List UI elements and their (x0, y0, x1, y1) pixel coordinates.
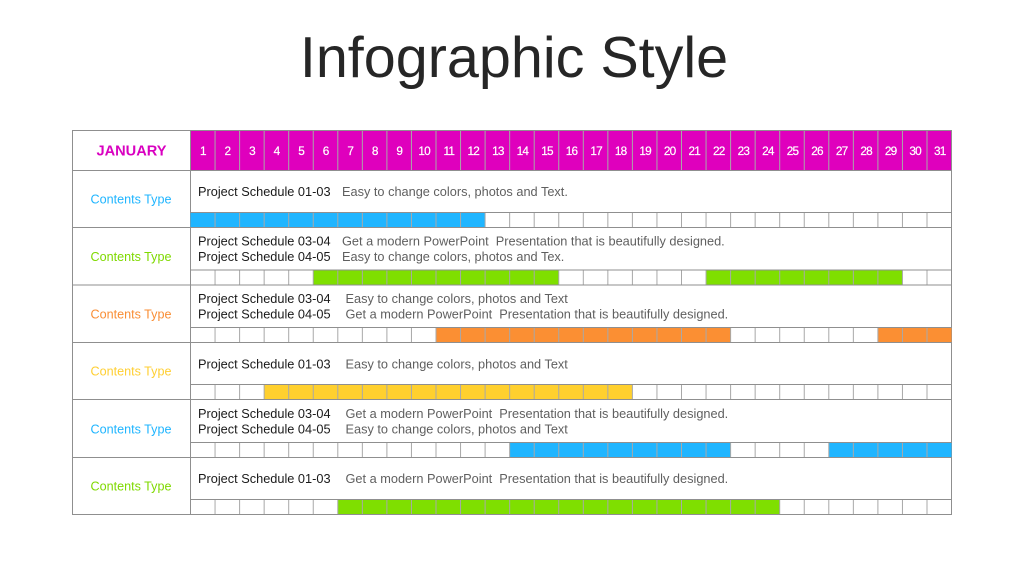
row 4 description: Project Schedule 01-03 (198, 356, 331, 372)
row 4 description (198, 356, 568, 372)
row 2 description: Project Schedule 03-04 (198, 234, 331, 248)
row 1 description: Easy to change colors, photos and Text. (342, 184, 568, 199)
row 3 label: Contents Type (91, 308, 171, 322)
row 3 timeline bar (190, 327, 952, 343)
day header: 23 (738, 144, 750, 158)
title: Infographic Style (300, 26, 728, 90)
day header: 3 (249, 144, 256, 158)
row 1 timeline bar (190, 212, 952, 228)
day header: 10 (418, 144, 431, 158)
day header: 13 (492, 144, 505, 158)
row 5 description: Project Schedule 04-05 (198, 422, 331, 436)
row 5 label: Contents Type (91, 422, 171, 436)
day header: 14 (517, 144, 529, 158)
day header: 30 (909, 144, 922, 158)
day header: 4 (274, 144, 281, 158)
row 2 description (198, 234, 725, 264)
row 2 label: Contents Type (91, 250, 171, 264)
day header: 26 (811, 144, 824, 158)
day header: 25 (787, 144, 799, 158)
row 5 description: Get a modern PowerPoint Presentation that is beautifully designed. (346, 406, 728, 421)
row 6 description: Get a modern PowerPoint Presentation that is beautifully designed. (346, 471, 728, 486)
row 6 description: Project Schedule 01-03 (198, 471, 331, 486)
day header: 27 (836, 144, 848, 158)
row 4 description: Easy to change colors, photos and Text (346, 356, 568, 372)
day header: 9 (396, 144, 403, 158)
row 1 (72, 170, 952, 228)
month label cell (72, 130, 190, 170)
row 6 label: Contents Type (91, 480, 171, 494)
schedule table (72, 130, 952, 515)
day header: 17 (590, 144, 602, 158)
row 1 description: Project Schedule 01-03 (198, 184, 331, 199)
day header: 22 (713, 144, 725, 158)
row 3 (72, 285, 952, 343)
row 4 timeline bar (190, 384, 952, 400)
day header: 29 (885, 144, 897, 158)
day header (190, 130, 952, 170)
row 5 (72, 400, 952, 458)
row 5 description: Project Schedule 03-04 (198, 406, 331, 421)
row 1 label: Contents Type (91, 192, 171, 206)
day header: 20 (664, 144, 677, 158)
row 6 (72, 458, 952, 515)
day header: 12 (468, 144, 479, 158)
day header: 21 (689, 144, 700, 158)
day header: 1 (200, 144, 207, 158)
row 2 description: Easy to change colors, photos and Tex. (342, 249, 564, 264)
day header: 24 (762, 144, 775, 158)
day header: 5 (298, 144, 305, 158)
row 5 description: Easy to change colors, photos and Text (346, 422, 568, 436)
row 2 description: Get a modern PowerPoint Presentation that is beautifully designed. (342, 234, 725, 248)
row 1 description (198, 184, 568, 199)
row 3 description: Project Schedule 03-04 (198, 291, 331, 306)
day header: 8 (372, 144, 379, 158)
row 3 description: Project Schedule 04-05 (198, 306, 331, 322)
day header: 31 (934, 144, 946, 158)
day header: 11 (443, 144, 454, 158)
row 3 description: Get a modern PowerPoint Presentation that is beautifully designed. (346, 306, 728, 322)
row 3 description: Easy to change colors, photos and Text (346, 291, 568, 306)
row 4 (72, 342, 952, 400)
row 2 description: Project Schedule 04-05 (198, 249, 331, 264)
day header: 6 (323, 144, 330, 158)
day header: 7 (347, 144, 354, 158)
row 5 timeline bar (190, 442, 952, 458)
day header: 2 (225, 144, 231, 158)
row 3 description (198, 291, 728, 322)
day header: 28 (860, 144, 873, 158)
row 6 timeline bar (190, 499, 952, 515)
day header: 19 (639, 144, 651, 158)
row 2 (72, 228, 952, 286)
row 2 timeline bar (190, 270, 952, 286)
day header: 16 (566, 144, 578, 158)
month label cell: JANUARY (96, 144, 167, 160)
row 4 label: Contents Type (91, 364, 171, 378)
row 5 description (198, 406, 728, 436)
day header: 15 (541, 144, 554, 158)
day header: 18 (615, 144, 628, 158)
